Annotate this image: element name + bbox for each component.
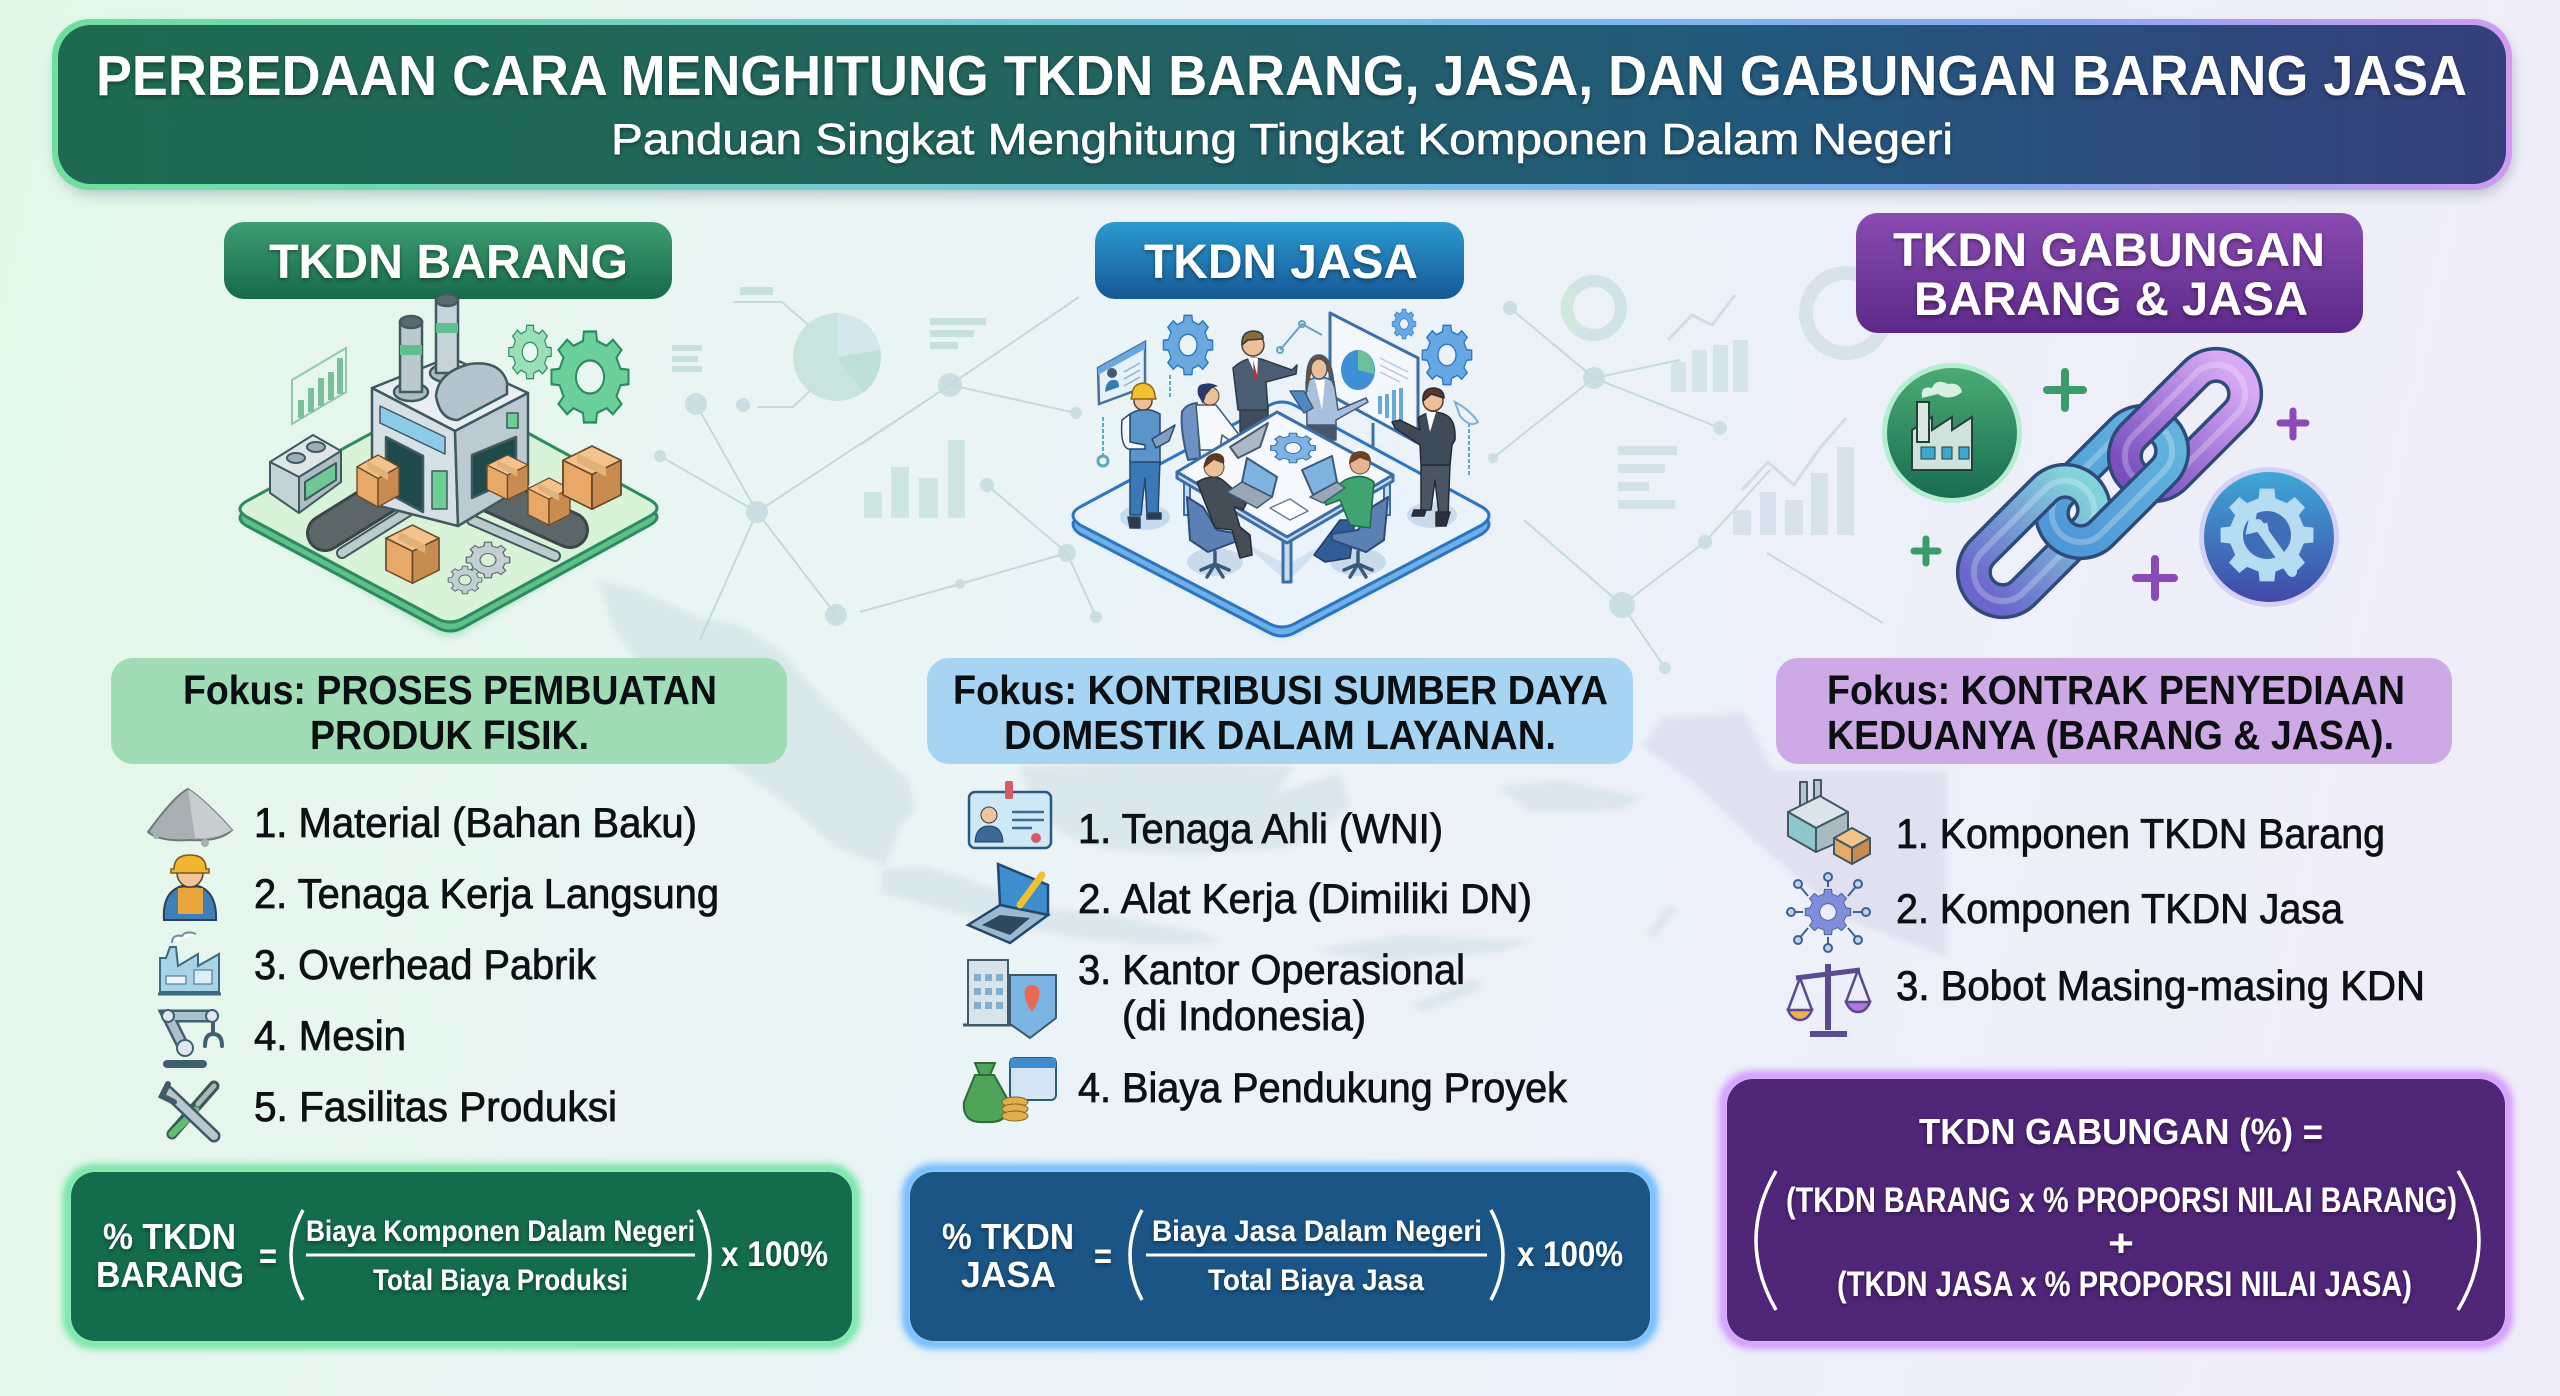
list: komponen Barang [148, 789, 719, 1136]
list text: Barang [254, 799, 719, 1130]
heading pill: TKDN Jasa [1095, 222, 1464, 299]
focus box: Gabungan [1776, 658, 2452, 764]
formula: TKDN Gabungan: (TKDN JASA x % PROPORSI NILAI JASA) [1837, 1265, 2412, 1304]
formula: TKDN Barang [68, 1169, 855, 1344]
heading pill: TKDN Barang: TKDN BARANG [269, 236, 628, 289]
list text: Barang: 2. Tenaga Kerja Langsung [254, 870, 719, 917]
list: komponen Gabungan [1787, 780, 2425, 1034]
icon: worker [164, 855, 216, 920]
factory building [372, 357, 528, 526]
focus box: Gabungan: KEDUANYA (BARANG & JASA). [1827, 712, 2394, 758]
background bar charts [864, 340, 1854, 535]
trend chart [292, 348, 346, 424]
focus box: Barang [111, 658, 787, 764]
formula: TKDN Gabungan: TKDN GABUNGAN (%) = [1919, 1111, 2323, 1152]
heading pill: TKDN Gabungan: TKDN GABUNGAN [1893, 223, 2325, 276]
list text: Jasa: 1. Tenaga Ahli (WNI) [1078, 805, 1443, 852]
list text: Barang: 3. Overhead Pabrik [254, 941, 597, 988]
AC unit [270, 435, 341, 513]
laptop of seated woman [1230, 423, 1268, 458]
floating gears and ID card [1098, 309, 1472, 404]
illustration: factory on platform [240, 294, 657, 636]
icon: wrench and screwdriver [162, 1084, 214, 1136]
list text: Gabungan [1896, 810, 2425, 1009]
cardboard boxes [357, 446, 621, 583]
list text: Jasa: 4. Biaya Pendukung Proyek [1078, 1064, 1568, 1111]
floor shadows [1120, 502, 1457, 582]
icon: laptop with wrench [968, 864, 1048, 943]
icon: factory with box [1788, 780, 1870, 864]
formula: TKDN Barang: = [259, 1235, 277, 1276]
woman presenting [1290, 355, 1368, 440]
background network nodes [654, 301, 1727, 674]
icon: money bag and calendar [964, 1058, 1056, 1122]
formula: TKDN Jasa [907, 1169, 1653, 1344]
standing man right [1392, 388, 1455, 526]
background trend line [1668, 295, 1846, 490]
plus signs [1914, 372, 2306, 597]
heading pill: TKDN Jasa: TKDN JASA [1144, 236, 1418, 289]
formula: TKDN Barang: Total Biaya Produksi [373, 1264, 628, 1297]
focus box: Barang: Fokus: PROSES PEMBUATAN [183, 667, 717, 713]
subtitle: Panduan Singkat Menghitung Tingkat Komponen Dalam Negeri [611, 115, 1953, 164]
list text: Gabungan: 1. Komponen TKDN Barang [1896, 810, 2385, 857]
hard-hat worker [1122, 383, 1175, 528]
icon: material pile [148, 789, 232, 847]
background network lines [660, 297, 1883, 668]
icon: ID card [969, 781, 1051, 848]
illustration: chain linking goods and services [1882, 353, 2339, 613]
list text: Jasa [1078, 805, 1568, 1111]
heading pill: TKDN Gabungan: BARANG & JASA [1914, 272, 2308, 325]
background map of Indonesia [597, 580, 1947, 1012]
meeting table [1177, 412, 1393, 582]
icon: factory [158, 932, 221, 994]
seated woman with chair [1182, 383, 1240, 460]
right conveyor [472, 492, 570, 556]
focus box: Jasa: Fokus: KONTRIBUSI SUMBER DAYA [953, 667, 1608, 713]
id card portrait [1105, 363, 1140, 392]
badge: factory [1882, 363, 2022, 503]
connector dots [1098, 321, 1478, 475]
focus box: Gabungan: Fokus: KONTRAK PENYEDIAAN [1827, 667, 2405, 713]
heading pill: TKDN Barang [224, 222, 672, 299]
focus box: Jasa: DOMESTIK DALAM LAYANAN. [1004, 712, 1556, 758]
focus box: Barang: PRODUK FISIK. [310, 712, 589, 758]
list text: Barang: 5. Fasilitas Produksi [254, 1083, 617, 1130]
gears [509, 325, 629, 422]
formula: TKDN Barang: Biaya Komponen Dalam Negeri [306, 1215, 695, 1248]
formula: TKDN Jasa: JASA [961, 1254, 1056, 1295]
formula: TKDN Jasa: x 100% [1517, 1235, 1623, 1274]
background donuts [1567, 273, 1886, 353]
focus box: Jasa [927, 658, 1633, 764]
heading pill: TKDN Gabungan [1856, 213, 2363, 333]
list text: Gabungan: 3. Bobot Masing-masing KDN [1896, 962, 2425, 1009]
list text: Barang: 4. Mesin [254, 1012, 406, 1059]
formula: TKDN Jasa: % TKDN [942, 1216, 1074, 1257]
list text: Jasa: 3. Kantor Operasional [1078, 946, 1465, 993]
formula: TKDN Barang: x 100% [721, 1235, 828, 1274]
header banner [52, 19, 2512, 194]
small gears [448, 542, 510, 594]
chimneys [394, 294, 464, 401]
background list glyphs [672, 287, 1677, 509]
list text: Barang: 1. Material (Bahan Baku) [254, 799, 697, 846]
seated man front left with chair and laptop [1187, 453, 1277, 577]
formula: TKDN Jasa: = [1094, 1235, 1112, 1276]
panel: TKDN Barang [68, 222, 855, 1344]
panel: TKDN Jasa [907, 222, 1653, 1344]
badge: gear and wrench [2199, 467, 2339, 607]
presentation screen [1330, 313, 1418, 447]
panel: TKDN Gabungan [1724, 213, 2508, 1344]
roof dome [436, 363, 507, 420]
left conveyor [325, 480, 426, 553]
chain links [1962, 353, 2257, 613]
illustration: team meeting on platform [1073, 309, 1489, 636]
icon: office and map pin [963, 960, 1056, 1038]
seated man front right with chair and laptop [1302, 451, 1388, 577]
icon: robot arm [162, 1010, 222, 1064]
list: komponen Jasa [963, 781, 1568, 1122]
background pie chart [793, 313, 881, 401]
icon: gear network [1787, 873, 1870, 952]
formula: TKDN Gabungan [1724, 1076, 2508, 1344]
formula: TKDN Barang: % TKDN [103, 1216, 236, 1257]
list text: Jasa: 2. Alat Kerja (Dimiliki DN) [1078, 875, 1532, 922]
list text: Gabungan: 2. Komponen TKDN Jasa [1896, 885, 2344, 932]
title: PERBEDAAN CARA MENGHITUNG TKDN BARANG, JASA, DAN GABUNGAN BARANG JASA [96, 44, 2467, 108]
formula: TKDN Jasa: Biaya Jasa Dalam Negeri [1152, 1215, 1482, 1248]
formula: TKDN Barang: BARANG [96, 1254, 244, 1295]
icon: balance scale [1788, 964, 1870, 1034]
standing man in suit [1233, 331, 1297, 432]
list text: Jasa: (di Indonesia) [1122, 992, 1366, 1039]
formula: TKDN Gabungan: + [2108, 1223, 2134, 1265]
formula: TKDN Jasa: Total Biaya Jasa [1208, 1264, 1424, 1297]
